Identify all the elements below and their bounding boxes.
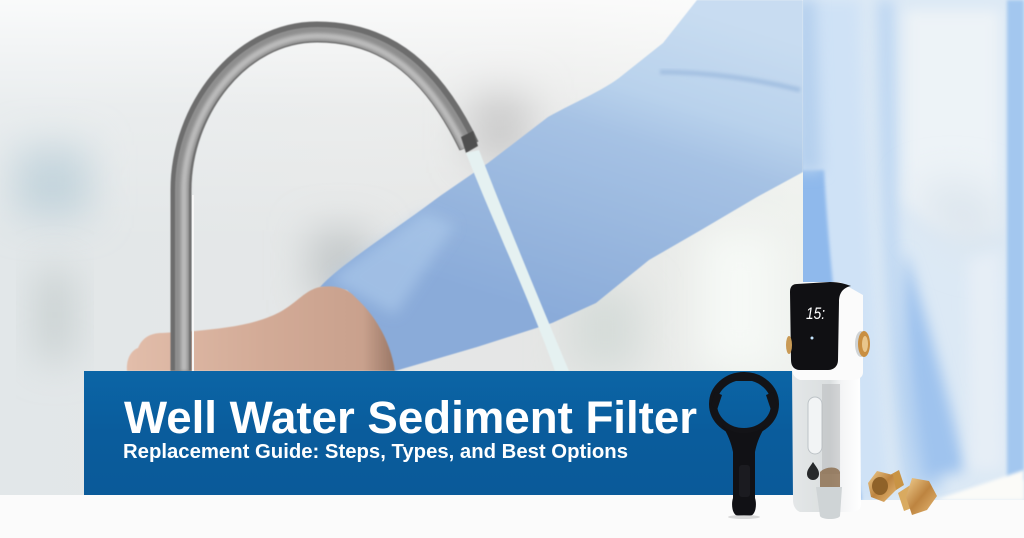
drain valve <box>816 487 842 519</box>
shirt torso <box>795 0 1024 500</box>
filter head <box>792 282 863 380</box>
water stream <box>466 150 569 371</box>
subtitle: Replacement Guide: Steps, Types, and Best Options <box>123 441 628 463</box>
title banner <box>84 371 820 495</box>
sleeve <box>320 0 803 371</box>
product: sediment filter <box>786 282 870 519</box>
sediment bowl <box>820 468 840 488</box>
left brass port <box>786 336 792 354</box>
display reading: 15: <box>806 304 825 323</box>
right brass port <box>855 331 870 357</box>
sight window <box>808 397 822 454</box>
title: Well Water Sediment Filter <box>124 392 697 443</box>
faucet <box>181 32 478 371</box>
brass fittings <box>868 470 937 515</box>
icon: filter wrench <box>711 372 777 519</box>
hand and forearm <box>127 286 395 371</box>
filter cartridge <box>822 384 840 474</box>
filter clear housing <box>792 370 861 512</box>
fitting left <box>868 470 904 502</box>
logo drop <box>807 462 819 480</box>
fitting right <box>898 478 937 515</box>
status led <box>810 336 814 340</box>
display panel <box>790 282 851 370</box>
